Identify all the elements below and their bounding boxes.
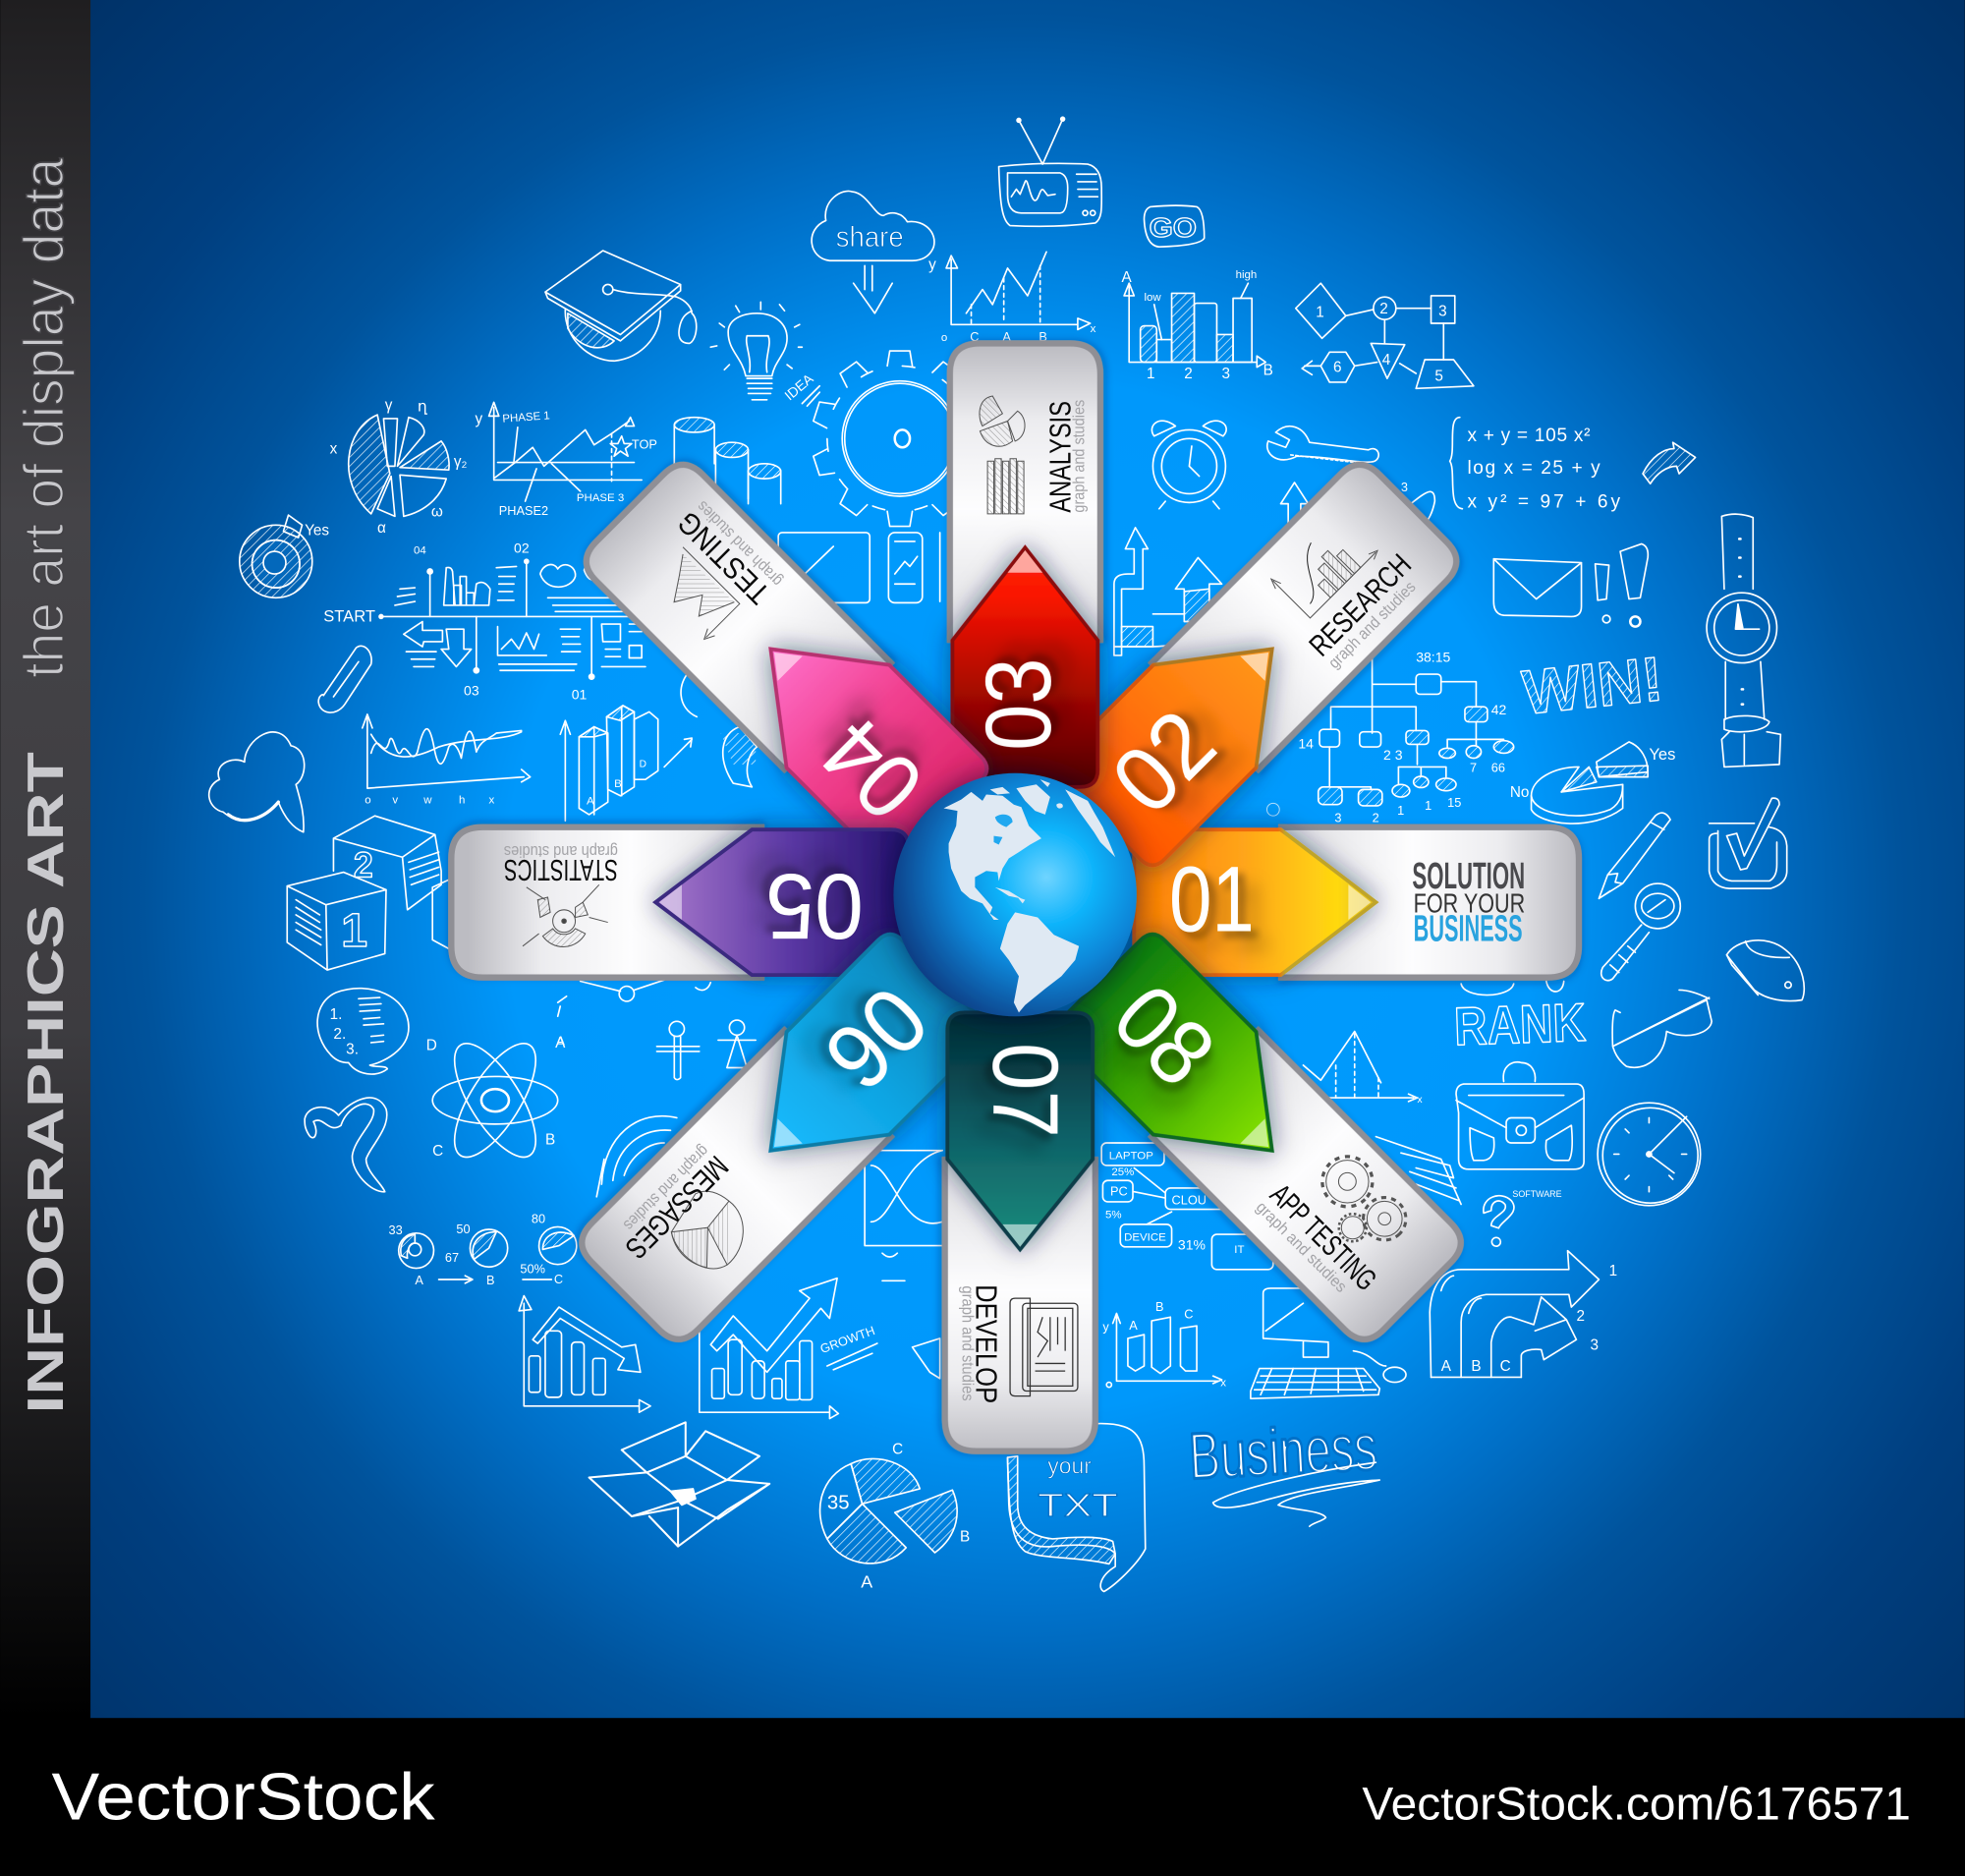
doodle: 3d bars: D <box>640 759 646 769</box>
doodle: flow chart: 5 <box>1434 369 1443 385</box>
doodle: graduation cap <box>545 251 697 361</box>
doodle: org chart <box>1266 649 1514 825</box>
doodle: falling bars chart <box>519 1296 650 1412</box>
doodle: rising bars chart <box>700 1279 877 1419</box>
arrow 03 <box>952 547 1097 787</box>
doodle: question software: SOFTWARE <box>1512 1189 1562 1199</box>
doodle: equations: log x = 25 + y <box>1468 458 1600 479</box>
card 01 <box>1278 824 1582 980</box>
arm 08: app testing (green) <box>1046 925 1474 1352</box>
doodle: go badge <box>1145 205 1205 247</box>
doodle: three arrows abc: B <box>1471 1358 1482 1375</box>
tip highlight 06 <box>761 1118 803 1160</box>
doodle: rising bars chart: GROWTH <box>818 1323 876 1356</box>
north america <box>943 792 1041 920</box>
doodle: speech bubble list: 2. <box>333 1026 346 1043</box>
doodle: start timeline: START <box>323 607 375 626</box>
doodle: org chart: 15 <box>1447 795 1461 810</box>
doodle: checkbox <box>1710 798 1787 888</box>
arm 06: messages (cyan) <box>569 925 996 1352</box>
greenland and arctic islands <box>990 779 1050 815</box>
develop label: DEVELOP <box>970 1284 1003 1403</box>
doodle: curved arrow <box>1643 442 1696 483</box>
doodle: small arrows behind research <box>1281 480 1434 529</box>
doodle: small 3d bars abc: B <box>1155 1299 1163 1314</box>
arm 07: develop (teal) <box>942 1012 1097 1453</box>
doodle: flow chart: 3 <box>1438 303 1447 319</box>
doodle: three arrows abc: A <box>1441 1358 1452 1375</box>
research sublabel: graph and studies <box>1324 578 1420 672</box>
arrow 08 <box>1049 928 1323 1202</box>
doodle: speech bubble list: 3. <box>346 1041 359 1057</box>
number 05: 05 <box>765 855 864 958</box>
doodle: small 3d bars abc: y <box>1102 1319 1109 1334</box>
card 07 <box>942 1157 1097 1453</box>
doodle: start timeline: 04 <box>414 545 426 557</box>
analysis sublabel: graph and studies <box>1069 400 1088 513</box>
doodle: three arrows abc: C <box>1500 1358 1511 1375</box>
doodle: pie chart <box>330 397 468 537</box>
doodle: business script <box>1188 1411 1379 1526</box>
doodle: big gear <box>813 351 987 527</box>
doodle: tv <box>999 117 1101 226</box>
doodle: cylinders <box>674 418 781 504</box>
card 04 <box>573 451 895 773</box>
doodle: wave chart: v <box>392 794 398 806</box>
doodle: wall clock <box>1598 1103 1701 1206</box>
doodle: wave chart: w <box>422 794 432 806</box>
sidebar title: INFOGRAPHICS ART <box>18 752 75 1413</box>
doodle: your txt bubble: TXT <box>1038 1488 1118 1524</box>
doodle: phase chart: PHASE 3 <box>577 492 624 504</box>
solution heading <box>1412 855 1525 950</box>
doodle: small 3d bars abc: A <box>1129 1318 1138 1333</box>
doodle: open box <box>590 1422 769 1547</box>
doodle: org chart: 38:15 <box>1416 649 1451 664</box>
doodle: tablet and phone <box>778 533 940 602</box>
doodle: bar chart high low: low <box>1145 292 1161 304</box>
arm 02: research (orange) <box>1046 451 1470 875</box>
doodle: small arrows behind research: 3 <box>1401 480 1408 494</box>
doodle: 3d bars <box>560 706 692 821</box>
doodle: 3d pie yes no: Yes <box>1649 745 1675 764</box>
doodle: question software <box>1484 1189 1562 1246</box>
doodle: briefcase <box>1456 1062 1584 1169</box>
doodle: 3d pie yes no: No <box>1510 784 1529 801</box>
doodle: phase chart: PHASE2 <box>499 503 548 518</box>
doodle: org chart: 1 <box>1397 803 1404 818</box>
doodle: bar chart high low: 3 <box>1222 366 1230 382</box>
doodle: speech bubble list <box>317 989 409 1074</box>
doodle: pie 35: A <box>861 1572 872 1592</box>
testing sublabel: graph and studies <box>693 497 786 591</box>
doodle: three arrows abc: 3 <box>1590 1336 1599 1353</box>
doodle: number cubes: 2 <box>354 846 373 885</box>
doodle: mind map laptop cloud device: IT <box>1234 1244 1245 1256</box>
doodle: line chart c a b: B <box>1039 329 1047 344</box>
doodle: donut row: A <box>415 1273 423 1287</box>
doodle: line chart c a b <box>928 252 1096 344</box>
messages label: MESSAGES <box>619 1149 735 1265</box>
arrow 04 <box>719 597 993 872</box>
doodle: bar chart high low: 1 <box>1147 366 1155 382</box>
doodle: start timeline: 01 <box>572 687 588 703</box>
number 04: 04 <box>802 699 942 839</box>
doodle: line chart c a b: o <box>941 332 947 344</box>
doodle: three arrows abc: 1 <box>1609 1263 1617 1279</box>
icon: triangle chart <box>647 547 743 643</box>
doodle: org chart: 7 <box>1470 761 1477 775</box>
doodle: org chart: 1 <box>1425 798 1432 813</box>
doodle: pencil <box>1599 813 1670 898</box>
number 01: 01 <box>1169 847 1255 950</box>
doodle: share cloud <box>812 191 934 313</box>
doodle: mind map laptop cloud device <box>1101 1143 1273 1270</box>
doodle: mind map laptop cloud device: LAPTOP <box>1109 1151 1153 1163</box>
card 08 <box>1148 1027 1474 1352</box>
doodle: number cubes: 1 <box>341 904 367 957</box>
sidebar tagline: the art of display data <box>13 158 76 678</box>
doodle: phase chart: y <box>476 411 483 427</box>
caribbean <box>995 887 1025 903</box>
doodle: wave chart: x <box>489 794 495 806</box>
doodle: small 3d bars abc: x <box>1220 1377 1226 1389</box>
testing label: TESTING <box>671 505 776 610</box>
tip highlight 07 <box>1002 1224 1038 1247</box>
doodle: pie chart: γ <box>385 397 393 414</box>
card 02 <box>1148 451 1470 773</box>
doodle: paperclip <box>318 646 371 712</box>
doodle: triangle chart <box>1303 1032 1423 1106</box>
analysis label: ANALYSIS <box>1043 401 1077 513</box>
doodle: envelope and exclamations <box>1493 543 1648 627</box>
icon: gears <box>1300 1146 1418 1264</box>
doodle: pie chart: ղ <box>418 398 427 415</box>
hudson bay and great lakes <box>993 815 1013 844</box>
solution heading: BUSINESS <box>1414 908 1523 950</box>
icon: laptop page <box>1010 1298 1078 1396</box>
doodle: atom: D <box>426 1038 437 1054</box>
tip highlight 01 <box>1348 884 1371 920</box>
doodle: phase chart <box>476 402 657 518</box>
doodle: donut row: 67 <box>445 1250 459 1265</box>
arrow 06 <box>719 928 993 1202</box>
doodle: org chart: 3 <box>1334 811 1341 825</box>
doodle: equations: x + y = 105 x² <box>1468 426 1590 446</box>
doodle: donut row: B <box>486 1273 495 1287</box>
doodle: laptop screen chart and bits <box>865 1151 942 1379</box>
doodle: number cubes <box>287 816 449 970</box>
doodle: glasses <box>1612 990 1712 1067</box>
doodle: pie chart: x <box>330 441 338 458</box>
number 07: 07 <box>974 1043 1077 1138</box>
doodle: speech bubble list: 1. <box>330 1006 342 1023</box>
doodle: people <box>556 980 756 1080</box>
doodle: three arrows abc <box>1430 1251 1617 1377</box>
arrow 07 <box>947 1012 1093 1249</box>
icon: growth chart <box>1268 512 1380 623</box>
icon: envelope pie <box>658 1180 760 1282</box>
doodle: line chart c a b: x <box>1091 323 1096 335</box>
doodle: computer and keyboard <box>1251 1288 1406 1398</box>
doodle: wristwatch <box>1707 514 1780 767</box>
app testing sublabel: graph and studies <box>1253 1198 1351 1296</box>
doodle: donut row: 80 <box>532 1212 545 1226</box>
doodle: 3d bars: A <box>587 796 594 808</box>
card 03 <box>947 341 1102 643</box>
doodle: 3d bars: B <box>614 778 622 790</box>
doodle: start timeline: 03 <box>464 683 479 699</box>
icon: gear dial <box>523 884 608 946</box>
tip highlight 04 <box>761 640 803 681</box>
messages sublabel: graph and studies <box>620 1142 713 1234</box>
doodle: pie 35: B <box>960 1529 970 1546</box>
doodle: big three <box>305 1098 387 1192</box>
doodle: bar chart high low <box>1122 269 1273 382</box>
arm 04: testing (pink) <box>573 451 996 875</box>
doodle: spiral target yes: Yes <box>305 523 329 540</box>
doodle: flow chart: 4 <box>1382 352 1391 369</box>
doodle: alarm clock <box>1151 421 1226 509</box>
doodle: phase chart: TOP <box>632 437 657 452</box>
doodle: share cloud: share <box>836 221 904 254</box>
doodle: line chart c a b: y <box>928 256 936 273</box>
solution heading: SOLUTION <box>1412 855 1525 897</box>
doodle: line chart c a b: A <box>1002 329 1011 344</box>
doodle: mind map laptop cloud device: 31% <box>1178 1236 1206 1252</box>
doodle: mind map laptop cloud device: CLOU <box>1172 1192 1207 1207</box>
doodle: magnifier <box>1601 883 1680 981</box>
doodle: books <box>1376 1137 1461 1204</box>
statistics label: STATISTICS <box>504 853 618 886</box>
doodle: hook shape <box>681 670 757 787</box>
doodle: atom: B <box>545 1131 555 1148</box>
vectorstock url: VectorStock.com/6176571 <box>1362 1778 1911 1830</box>
doodle: win: WIN! <box>1519 643 1666 728</box>
doodle: spiral target yes <box>240 515 329 597</box>
doodle: rainbow arc <box>596 1116 677 1197</box>
doodle: donut row: C <box>554 1272 563 1286</box>
doodle: computer mouse <box>1726 940 1804 1001</box>
solution heading: FOR YOUR <box>1414 887 1525 918</box>
doodle: pie 35: 35 <box>827 1492 850 1513</box>
tip highlight 02 <box>1240 640 1281 681</box>
number 03: 03 <box>967 657 1070 751</box>
doodle: wave chart: h <box>459 794 465 806</box>
europe and africa edge <box>1056 789 1115 857</box>
develop sublabel: graph and studies <box>959 1285 978 1401</box>
tip highlight 03 <box>1008 550 1042 573</box>
arm 01: solution for your business (yellow) <box>1134 824 1582 980</box>
doodle: mind map laptop cloud device: 25% <box>1111 1166 1134 1178</box>
doodle: line chart c a b: C <box>970 329 979 344</box>
sidebar <box>0 0 90 1718</box>
doodle: your txt bubble: your <box>1047 1453 1092 1479</box>
vectorstock logo: VectorStock <box>52 1761 435 1835</box>
doodle: org chart: 66 <box>1491 761 1505 775</box>
doodle: atom: A <box>555 1035 566 1052</box>
doodle: small 3d bars abc: C <box>1184 1307 1194 1322</box>
doodle: go badge: GO <box>1150 212 1197 243</box>
doodle: pie chart: α <box>377 520 386 537</box>
doodle: org chart: 2 3 <box>1383 747 1403 763</box>
number 06: 06 <box>806 967 947 1109</box>
arrow 02 <box>1049 597 1323 872</box>
doodle: thought cloud <box>209 732 305 832</box>
doodle: bar chart high low: high <box>1236 269 1257 281</box>
doodle: small 3d bars abc <box>1102 1299 1226 1389</box>
doodle: your txt bubble <box>1008 1424 1146 1592</box>
doodle: light bulb idea: IDEA <box>781 370 816 403</box>
doodle: equations: x y² = 97 + 6y <box>1468 491 1621 512</box>
tip highlight 05 <box>659 884 682 920</box>
doodle: mind map laptop cloud device: 5% <box>1105 1210 1122 1222</box>
icon: pie and bars <box>980 396 1025 514</box>
doodle: org chart: 2 <box>1373 811 1379 825</box>
doodle: atom <box>426 1032 566 1168</box>
doodle: donut row: 50 <box>456 1222 471 1236</box>
doodle: equations <box>1450 418 1621 512</box>
doodle: people: A <box>556 1034 565 1049</box>
doodle: bar chart high low: A <box>1122 269 1133 286</box>
doodle: 3d pie yes no <box>1510 742 1675 824</box>
doodle: rank: RANK <box>1453 992 1587 1057</box>
doodle: pie chart: ω <box>431 503 443 520</box>
doodle: pie 35: C <box>892 1441 903 1457</box>
doodle: bar chart high low: B <box>1263 362 1273 378</box>
doodle: flow chart: 6 <box>1333 360 1342 376</box>
statistics sublabel: graph and studies <box>504 842 618 861</box>
doodle: org chart: 42 <box>1491 702 1507 717</box>
doodle: light bulb idea <box>710 302 819 406</box>
doodle: mind map laptop cloud device: DEVICE <box>1124 1231 1166 1243</box>
doodle: mind map laptop cloud device: PC <box>1110 1184 1128 1199</box>
app testing label: APP TESTING <box>1263 1178 1383 1297</box>
arrow 01 <box>1134 829 1376 975</box>
doodle: donut row <box>389 1212 577 1287</box>
doodle: three arrows abc: 2 <box>1576 1308 1585 1325</box>
number 08: 08 <box>1095 965 1235 1106</box>
card 06 <box>569 1027 895 1352</box>
doodle: donut row: 50% <box>520 1262 545 1277</box>
doodle: wave chart <box>363 714 531 806</box>
doodle: phase chart: PHASE 1 <box>502 410 550 426</box>
doodle: atom: C <box>432 1143 443 1160</box>
card 05 <box>449 824 764 980</box>
south america <box>1000 912 1079 1012</box>
doodle: triangle chart: x <box>1418 1095 1423 1106</box>
doodle: pie chart: γ₂ <box>454 453 468 470</box>
doodle: cups under first card <box>1461 981 1564 995</box>
arm 03: analysis (red) <box>947 341 1102 787</box>
doodle: bar chart high low: 2 <box>1184 366 1193 382</box>
doodle: start timeline: 02 <box>514 540 530 555</box>
doodle: flow chart <box>1296 283 1474 388</box>
globe <box>893 773 1137 1016</box>
bottom bar <box>0 1718 1965 1876</box>
doodle: org chart: 14 <box>1298 735 1314 751</box>
arm 05: statistics (purple) <box>449 824 909 980</box>
number 02: 02 <box>1093 691 1235 833</box>
tip highlight 08 <box>1240 1118 1281 1160</box>
doodle: donut row: 33 <box>389 1222 403 1237</box>
doodles <box>209 117 1804 1592</box>
research label: RESEARCH <box>1303 547 1418 662</box>
doodle: flow chart: 2 <box>1379 301 1388 317</box>
doodle: curvy arrow behind arms <box>1114 528 1222 655</box>
arrow 05 <box>655 829 909 975</box>
doodle: flow chart: 1 <box>1316 305 1324 321</box>
doodle: start timeline <box>323 540 646 703</box>
doodle: wave chart: o <box>365 794 371 806</box>
doodle: pie 35 <box>820 1441 970 1592</box>
doodle: wrench <box>1267 426 1378 464</box>
doodle: business script: Business <box>1188 1411 1378 1494</box>
